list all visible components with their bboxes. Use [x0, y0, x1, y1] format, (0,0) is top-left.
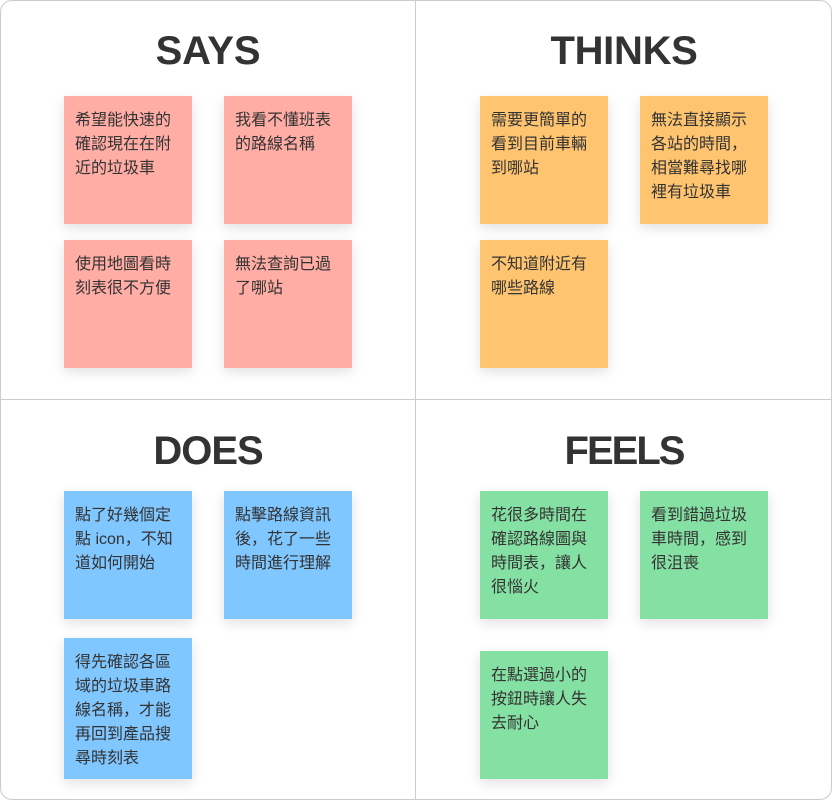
note: confirm route names [64, 638, 192, 779]
note: tapped icons [64, 491, 192, 619]
note: confirm route names: 得先確認各區域的垃圾車路線名稱，才能再回到產品搜尋時刻表 [75, 654, 171, 767]
note: simpler view: 需要更簡單的看到目前車輛到哪站 [491, 112, 587, 177]
panel: thinks [476, 29, 772, 376]
note: map timetable: 使用地圖看時刻表很不方便 [75, 256, 171, 297]
note: small buttons [480, 651, 608, 779]
note: stop times [640, 96, 768, 224]
note: nearby routes [480, 240, 608, 368]
note: passed stops: 無法查詢已過了哪站 [235, 256, 331, 297]
panel: says [60, 29, 356, 376]
note: quick check [64, 96, 192, 224]
note: time spent [480, 491, 608, 619]
heading: says: SAYS [156, 29, 260, 73]
panel: feels [476, 429, 772, 786]
note: simpler view [480, 96, 608, 224]
note: route names [224, 96, 352, 224]
note: route info [224, 491, 352, 619]
note: time spent: 花很多時間在確認路線圖與時間表，讓人很惱火 [491, 507, 587, 596]
note: missed truck [640, 491, 768, 619]
note: route info: 點擊路線資訊後，花了一些時間進行理解 [235, 507, 331, 572]
note: map timetable [64, 240, 192, 368]
note: nearby routes: 不知道附近有哪些路線 [491, 256, 587, 297]
note: quick check: 希望能快速的確認現在在附近的垃圾車 [75, 112, 171, 177]
heading: thinks: THINKS [550, 29, 698, 73]
note: stop times: 無法直接顯示各站的時間，相當難尋找哪裡有垃圾車 [651, 112, 747, 201]
note: small buttons: 在點選過小的按鈕時讓人失去耐心 [491, 667, 587, 732]
note: passed stops [224, 240, 352, 368]
panel: does [60, 429, 356, 786]
heading: does: DOES [153, 429, 263, 473]
note: tapped icons: 點了好幾個定點 icon，不知道如何開始 [75, 507, 173, 572]
note: route names: 我看不懂班表的路線名稱 [235, 112, 331, 153]
heading: feels: FEELS [565, 429, 683, 473]
note: missed truck: 看到錯過垃圾車時間，感到很沮喪 [651, 507, 747, 572]
